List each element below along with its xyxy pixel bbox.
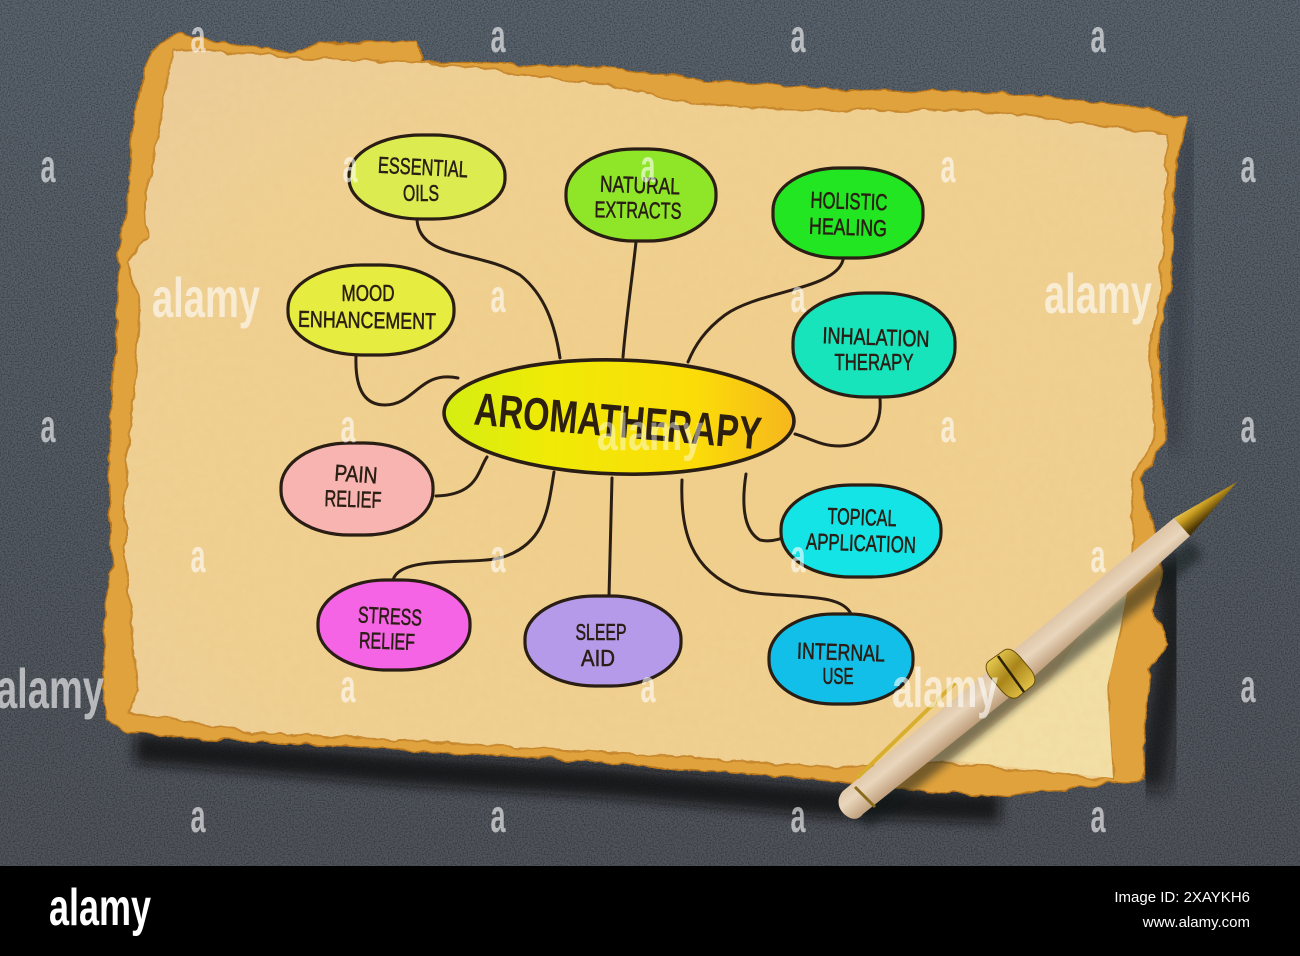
watermark labels: a	[40, 140, 56, 192]
watermark labels: a	[1090, 10, 1106, 62]
watermark labels: a	[940, 400, 956, 452]
watermark labels: a	[790, 530, 806, 582]
watermark labels: a	[640, 660, 656, 712]
footer image id	[1114, 889, 1250, 931]
paper shadow	[135, 130, 1190, 808]
watermark labels: alamy	[152, 266, 260, 329]
node: Essential Oils: ESSENTIAL	[377, 152, 469, 182]
node: Internal Use	[769, 614, 913, 704]
connector lines	[356, 220, 880, 614]
node: Inhalation Therapy: INHALATION	[822, 322, 930, 352]
node: Internal Use: INTERNAL	[797, 637, 886, 667]
node: Inhalation Therapy: THERAPY	[834, 349, 914, 375]
node: Mood Enhancement: MOOD	[342, 280, 394, 306]
watermark labels: a	[1240, 140, 1256, 192]
icon: wooden pen	[839, 482, 1237, 820]
watermark labels: a	[342, 140, 358, 192]
watermark labels: a	[1240, 660, 1256, 712]
node: Mood Enhancement: ENHANCEMENT	[298, 306, 436, 334]
watermark labels: alamy	[597, 404, 703, 462]
node: Natural Extracts: NATURAL	[600, 171, 681, 199]
watermark labels: a	[640, 140, 656, 192]
node: Holistic Healing	[773, 168, 923, 258]
node: Pain Relief	[281, 443, 433, 535]
watermark labels: a	[1090, 530, 1106, 582]
node: Stress Relief: STRESS	[357, 601, 423, 631]
watermark labels: a	[490, 530, 506, 582]
node: Sleep Aid: AID	[581, 645, 615, 671]
node: Natural Extracts: EXTRACTS	[594, 196, 682, 224]
node: Pain Relief: RELIEF	[324, 485, 382, 513]
node: Essential Oils	[349, 135, 505, 219]
node: Sleep Aid: SLEEP	[576, 619, 626, 645]
watermark labels: a	[790, 10, 806, 62]
watermark labels: alamy	[0, 657, 104, 720]
central node: Aromatherapy: AROMATHERAPY	[472, 383, 764, 459]
node: Topical Application	[781, 485, 941, 577]
watermark labels: a	[490, 270, 506, 322]
node: Essential Oils: OILS	[403, 180, 439, 206]
watermark labels: a	[1240, 400, 1256, 452]
node: Pain Relief: PAIN	[334, 460, 378, 488]
watermark labels: alamy	[1044, 262, 1152, 325]
footer image id: www.alamy.com	[1142, 914, 1250, 931]
watermark labels: a	[490, 790, 506, 842]
watermark labels: a	[340, 400, 356, 452]
central node: Aromatherapy	[443, 355, 795, 479]
watermark labels: a	[790, 790, 806, 842]
node: Holistic Healing: HOLISTIC	[810, 187, 888, 215]
node: Sleep Aid	[525, 596, 681, 686]
node: Stress Relief: RELIEF	[359, 627, 415, 655]
node: Topical Application: APPLICATION	[806, 528, 916, 558]
watermark labels: a	[490, 10, 506, 62]
watermark labels: a	[40, 400, 56, 452]
watermark labels: a	[190, 790, 206, 842]
footer image id: Image ID: 2XAYKH6	[1114, 889, 1250, 906]
node: Natural Extracts	[566, 149, 716, 241]
node: Topical Application: TOPICAL	[827, 503, 897, 531]
node: Stress Relief	[318, 580, 470, 670]
node: Internal Use: USE	[822, 663, 854, 689]
panel: handmade paper sheet	[100, 30, 1187, 800]
watermark labels: a	[190, 530, 206, 582]
node: Inhalation Therapy	[793, 293, 955, 397]
watermark labels: a	[940, 140, 956, 192]
watermark labels: alamy	[892, 656, 998, 719]
footer bar	[0, 866, 1300, 956]
footer logo: alamy	[49, 879, 151, 937]
node: Holistic Healing: HEALING	[809, 213, 887, 241]
watermark labels: a	[790, 270, 806, 322]
watermark labels: a	[190, 10, 206, 62]
node: Mood Enhancement	[288, 265, 454, 355]
watermark labels: a	[340, 660, 356, 712]
watermark labels: a	[1090, 790, 1106, 842]
